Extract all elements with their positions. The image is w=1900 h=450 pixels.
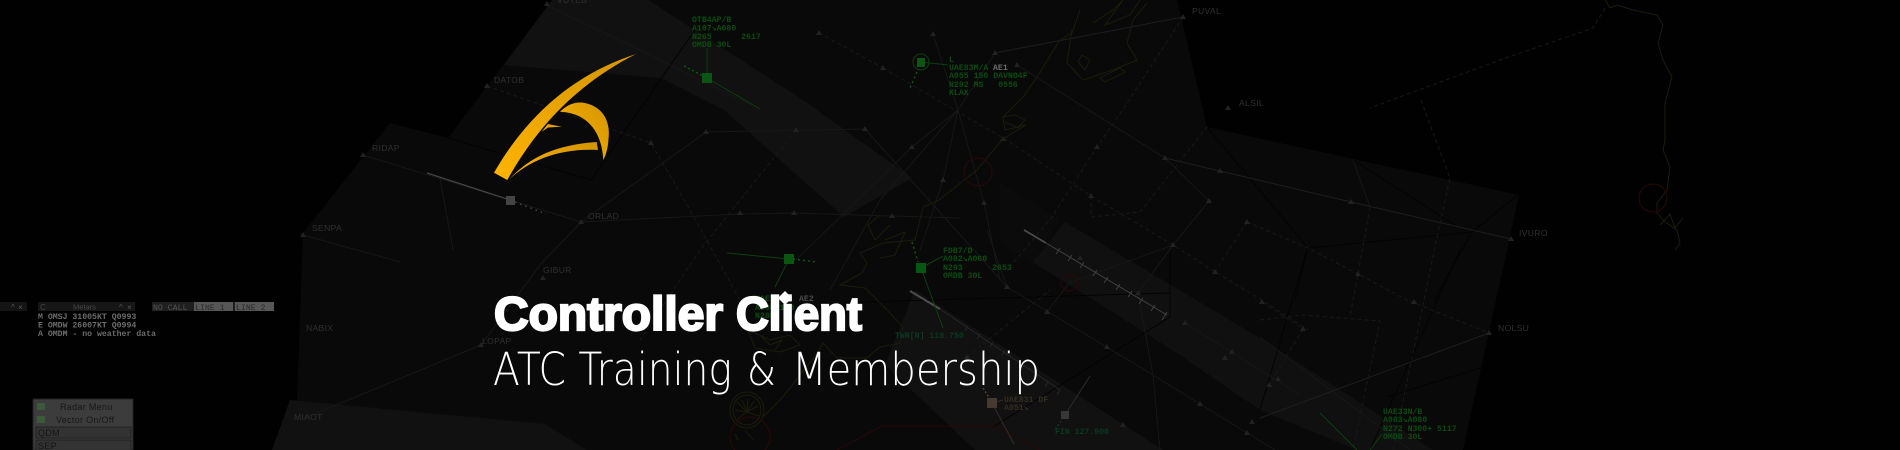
panel: radar menu	[33, 399, 133, 450]
waypoint labels: LOPAP	[482, 336, 512, 346]
aircraft: UAE83M/A: KLAX	[949, 89, 969, 98]
aircraft: OTB4AP/B: A107↘A080	[692, 24, 736, 34]
panel: metars window: C	[40, 303, 46, 312]
title: Controller	[494, 287, 723, 340]
aircraft: UAE83M/A: A055 150 DAVNO4F	[949, 72, 1028, 81]
waypoint labels: ALSIL	[1239, 98, 1264, 108]
subtitle: ATC Training	[493, 343, 732, 396]
aircraft: FDB7/D: N293 2653	[943, 264, 1012, 273]
aircraft: AE2 behind title: AE2	[799, 295, 814, 304]
aircraft: FIN 127.900: FIN 127.900	[1055, 428, 1109, 437]
waypoint labels: ORLAD	[588, 211, 619, 221]
panel: metars window	[0, 302, 156, 339]
waypoint labels	[294, 0, 1548, 422]
aircraft: UAE831: A051↘	[1004, 404, 1029, 413]
waypoint labels: IVURO	[1519, 228, 1548, 238]
waypoint triangles	[300, 1, 1514, 435]
aircraft: AE2 behind title: UAE7/B	[755, 294, 785, 304]
panel: metars window: A OMDM - no weather data	[38, 329, 156, 339]
panel: metars window: Metars	[73, 302, 96, 312]
panel: radar menu: QDM	[38, 428, 60, 438]
aircraft: grey unidentified target	[427, 173, 546, 214]
waypoint labels: MIAOT	[294, 412, 323, 422]
waypoint labels: DATOB	[494, 75, 524, 85]
aircraft: UAE33N/B: UAE33N/B	[1383, 407, 1422, 417]
aircraft: FDB7/D: FDB7/D	[943, 246, 973, 256]
title: Client	[736, 287, 862, 340]
panel: metars window: ×	[18, 303, 23, 312]
sector boundary lines	[448, 30, 1518, 450]
sector area	[272, 0, 1519, 450]
aircraft: UAE83M/A: UAE83M/A	[949, 63, 988, 73]
title	[494, 287, 862, 340]
airways dashed	[487, 8, 1605, 450]
waypoint labels: PUVAL	[1192, 6, 1221, 16]
aircraft: OTB4AP/B: N265 2617	[692, 33, 761, 42]
panel: radar menu: Radar Menu	[60, 402, 113, 412]
icon: gold feather logo	[494, 54, 636, 180]
aircraft: AE2 behind title: A060 150	[755, 304, 794, 313]
panel: metars window: M OMSJ 31005KT Q0993	[38, 313, 136, 322]
panel: metars window: ^	[11, 303, 15, 312]
aircraft: UAE33N/B	[1320, 407, 1457, 450]
aircraft: UAE83M/A: AE1	[993, 64, 1008, 73]
subtitle: &	[747, 343, 776, 396]
aircraft: OTB4AP/B	[684, 15, 761, 109]
panel: call status bar: LINE 1	[195, 304, 225, 313]
panel: call status bar: LINE 2	[236, 304, 266, 313]
aircraft: AE2 behind title	[727, 253, 817, 321]
aircraft: AE2 behind title: N280	[755, 312, 775, 321]
aircraft: UAE831: UAE831 DF	[1004, 396, 1048, 405]
panel: metars window: E OMDW 26007KT Q0994	[38, 322, 136, 330]
panel: metars window: ×	[127, 303, 132, 312]
panel: metars window: ^	[119, 303, 123, 312]
airways solid	[300, 5, 1410, 450]
frequency label: TWR: TWR[N] 118.750	[895, 331, 964, 341]
aircraft: UAE83M/A: N292 MS 0556	[949, 81, 1018, 90]
aircraft: OTB4AP/B: OTB4AP/B	[692, 15, 731, 25]
subtitle	[493, 343, 1040, 396]
aircraft: FDB7/D: OMDB 30L	[943, 272, 982, 281]
panel: radar menu: Vector On/Off	[56, 415, 114, 425]
red restricted circles and boundary	[730, 158, 1667, 450]
aircraft: FDB7/D: A082↘A060	[943, 255, 987, 264]
waypoint labels: RIDAP	[372, 143, 400, 153]
aircraft: UAE33N/B: OMDB 30L	[1383, 433, 1422, 442]
aircraft: UAE83M/A	[910, 54, 1028, 98]
aircraft: OTB4AP/B: OMDB 30L	[692, 41, 731, 50]
aircraft: FIN 127.900	[1054, 376, 1109, 437]
waypoint labels: GIBUR	[543, 265, 572, 275]
waypoint labels: SENPA	[312, 223, 342, 233]
panel: call status bar	[152, 302, 274, 313]
aircraft: UAE831	[983, 388, 1048, 444]
aircraft: UAE33N/B: N272 N300+ 5117	[1383, 425, 1457, 434]
waypoint labels: NOLSU	[1498, 323, 1529, 333]
coastline	[730, 0, 1683, 440]
airways brighter routes	[995, 17, 1511, 418]
waypoint labels: NABIX	[306, 323, 333, 333]
aircraft: UAE33N/B: A083↘A080	[1383, 416, 1427, 425]
panel: call status bar: NO CALL	[153, 304, 187, 313]
aircraft: UAE83M/A: L	[949, 56, 954, 65]
runway approach lines	[910, 230, 1167, 395]
aircraft: FDB7/D	[912, 242, 1012, 328]
subtitle: Membership	[792, 343, 1040, 396]
